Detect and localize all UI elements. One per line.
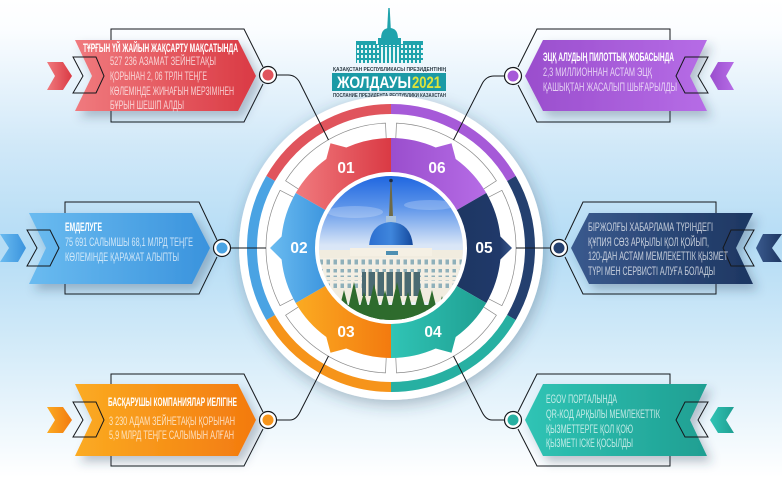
frame bbox=[111, 374, 263, 466]
arrow banner bbox=[75, 384, 256, 456]
panel 01: housing bbox=[47, 29, 276, 122]
logo title: ЖОЛДАУЫ bbox=[336, 73, 411, 92]
heading: ЕМДЕЛУГЕ bbox=[65, 222, 102, 234]
body text: ҚОРЫНАН 2, 06 ТРЛН ТЕҢГЕ bbox=[110, 69, 207, 83]
segment 02 bbox=[270, 193, 330, 303]
body text bbox=[65, 235, 193, 264]
node bbox=[504, 68, 522, 84]
icon: Akorda building bbox=[356, 8, 423, 63]
outline chevron bbox=[73, 57, 104, 93]
outline chevron bbox=[73, 402, 104, 437]
body text bbox=[543, 65, 677, 94]
panel 02: treatment bbox=[0, 202, 230, 294]
body text: БҰРЫН ШЕШІП АЛДЫ bbox=[110, 98, 184, 112]
body text: ҚЫЗМЕТТЕРГЕ ҚОЛ ҚОЮ bbox=[546, 422, 633, 436]
central wheel bbox=[239, 96, 543, 400]
arrow banner bbox=[571, 213, 753, 284]
body text: ҚАШЫҚТАН ЖАСАЛЫП ШЫҒАРЫЛДЫ bbox=[543, 80, 677, 94]
arrow banner bbox=[525, 384, 707, 456]
body text: ҚЫЗМЕТІ ІСКЕ ҚОСЫЛДЫ bbox=[546, 436, 633, 450]
number 03: 03 bbox=[337, 324, 355, 341]
number 06: 06 bbox=[428, 160, 446, 177]
small arrow bbox=[47, 407, 72, 433]
panel 05: one-time message bbox=[550, 202, 782, 294]
panel 04: eGov bbox=[504, 374, 734, 466]
logo bottom caption: ПОСЛАНИЕ ПРЕЗИДЕНТА РЕСПУБЛИКИ КАЗАХСТАН bbox=[333, 93, 446, 99]
logo year: 2021 bbox=[412, 73, 441, 92]
body text bbox=[110, 53, 234, 112]
small arrow bbox=[710, 407, 734, 433]
segment 05 bbox=[452, 193, 512, 303]
thin segment outlines bbox=[266, 123, 516, 373]
body text bbox=[109, 413, 235, 442]
frame bbox=[111, 29, 263, 122]
frame bbox=[565, 202, 716, 294]
panel 03: management companies bbox=[47, 374, 276, 466]
body text: 5,9 МЛРД ТЕҢГЕ САЛЫМЫН АЛҒАН bbox=[109, 428, 234, 442]
segment 04 bbox=[391, 283, 486, 358]
logo band bbox=[332, 73, 446, 91]
heading: ТҰРҒЫН ҮЙ ЖАЙЫН ЖАҚСАРТУ МАҚСАТЫНДА bbox=[83, 42, 238, 55]
segment 06 bbox=[391, 138, 486, 213]
node bbox=[550, 240, 568, 256]
body text: КӨЛЕМІНДЕ ЖИНАҒЫН МЕРЗІМІНЕН bbox=[110, 84, 234, 98]
frame bbox=[518, 374, 670, 466]
arrow banner bbox=[29, 213, 210, 284]
node bbox=[260, 66, 276, 84]
small arrow bbox=[47, 62, 72, 90]
frame bbox=[65, 202, 217, 294]
node bbox=[260, 412, 276, 428]
white disc bbox=[239, 96, 543, 400]
small arrow bbox=[710, 62, 734, 90]
body text: 527 236 АЗАМАТ ЗЕЙНЕТАҚЫ bbox=[110, 53, 216, 68]
body text bbox=[546, 392, 660, 450]
body text: 3 230 АДАМ ЗЕЙНЕТАҚЫ ҚОРЫНАН bbox=[109, 413, 235, 428]
center photo bbox=[315, 172, 467, 324]
node bbox=[214, 240, 230, 256]
connector lines bbox=[231, 75, 550, 420]
body text: QR-КОД АРҚЫЛЫ МЕМЛЕКЕТТІК bbox=[546, 407, 660, 421]
arrow banner bbox=[75, 40, 256, 111]
outer ring segments bbox=[252, 109, 530, 387]
number 04: 04 bbox=[424, 324, 442, 341]
logo: Zholdauy 2021 bbox=[332, 8, 446, 99]
number 02: 02 bbox=[290, 240, 308, 257]
small arrow bbox=[0, 234, 26, 262]
outline chevron bbox=[676, 57, 708, 93]
body text: EGOV ПОРТАЛЫНДА bbox=[546, 392, 617, 406]
outline chevron bbox=[27, 230, 59, 266]
body text: КӨЛЕМІНДЕ ҚАРАЖАТ АЛЫПТЫ bbox=[65, 250, 179, 264]
frame bbox=[518, 29, 670, 122]
number 01: 01 bbox=[337, 160, 355, 177]
body text bbox=[588, 220, 728, 278]
segment 03 bbox=[296, 283, 391, 358]
segment 01 bbox=[296, 138, 391, 213]
number 05: 05 bbox=[475, 240, 493, 257]
outline chevron bbox=[676, 402, 708, 437]
outline chevron bbox=[723, 230, 754, 266]
panel 06: digital births bbox=[504, 29, 734, 122]
heading: БАСҚАРУШЫ КОМПАНИЯЛАР ИЕЛІГІНЕ bbox=[108, 397, 237, 409]
small arrow bbox=[756, 234, 782, 262]
arrow banner bbox=[525, 40, 707, 111]
body text: 75 691 САЛЫМШЫ 68,1 МЛРД ТЕҢГЕ bbox=[65, 235, 193, 249]
logo top caption: ҚАЗАҚСТАН РЕСПУБЛИКАСЫ ПРЕЗИДЕНТІНІҢ bbox=[333, 67, 446, 73]
heading: ЭЦҚ АЛУДЫҢ ПИЛОТТЫҚ ЖОБАСЫНДА bbox=[543, 52, 674, 64]
body text: 2,3 МИЛЛИОННАН АСТАМ ЭЦҚ bbox=[543, 65, 652, 79]
node bbox=[504, 412, 522, 428]
